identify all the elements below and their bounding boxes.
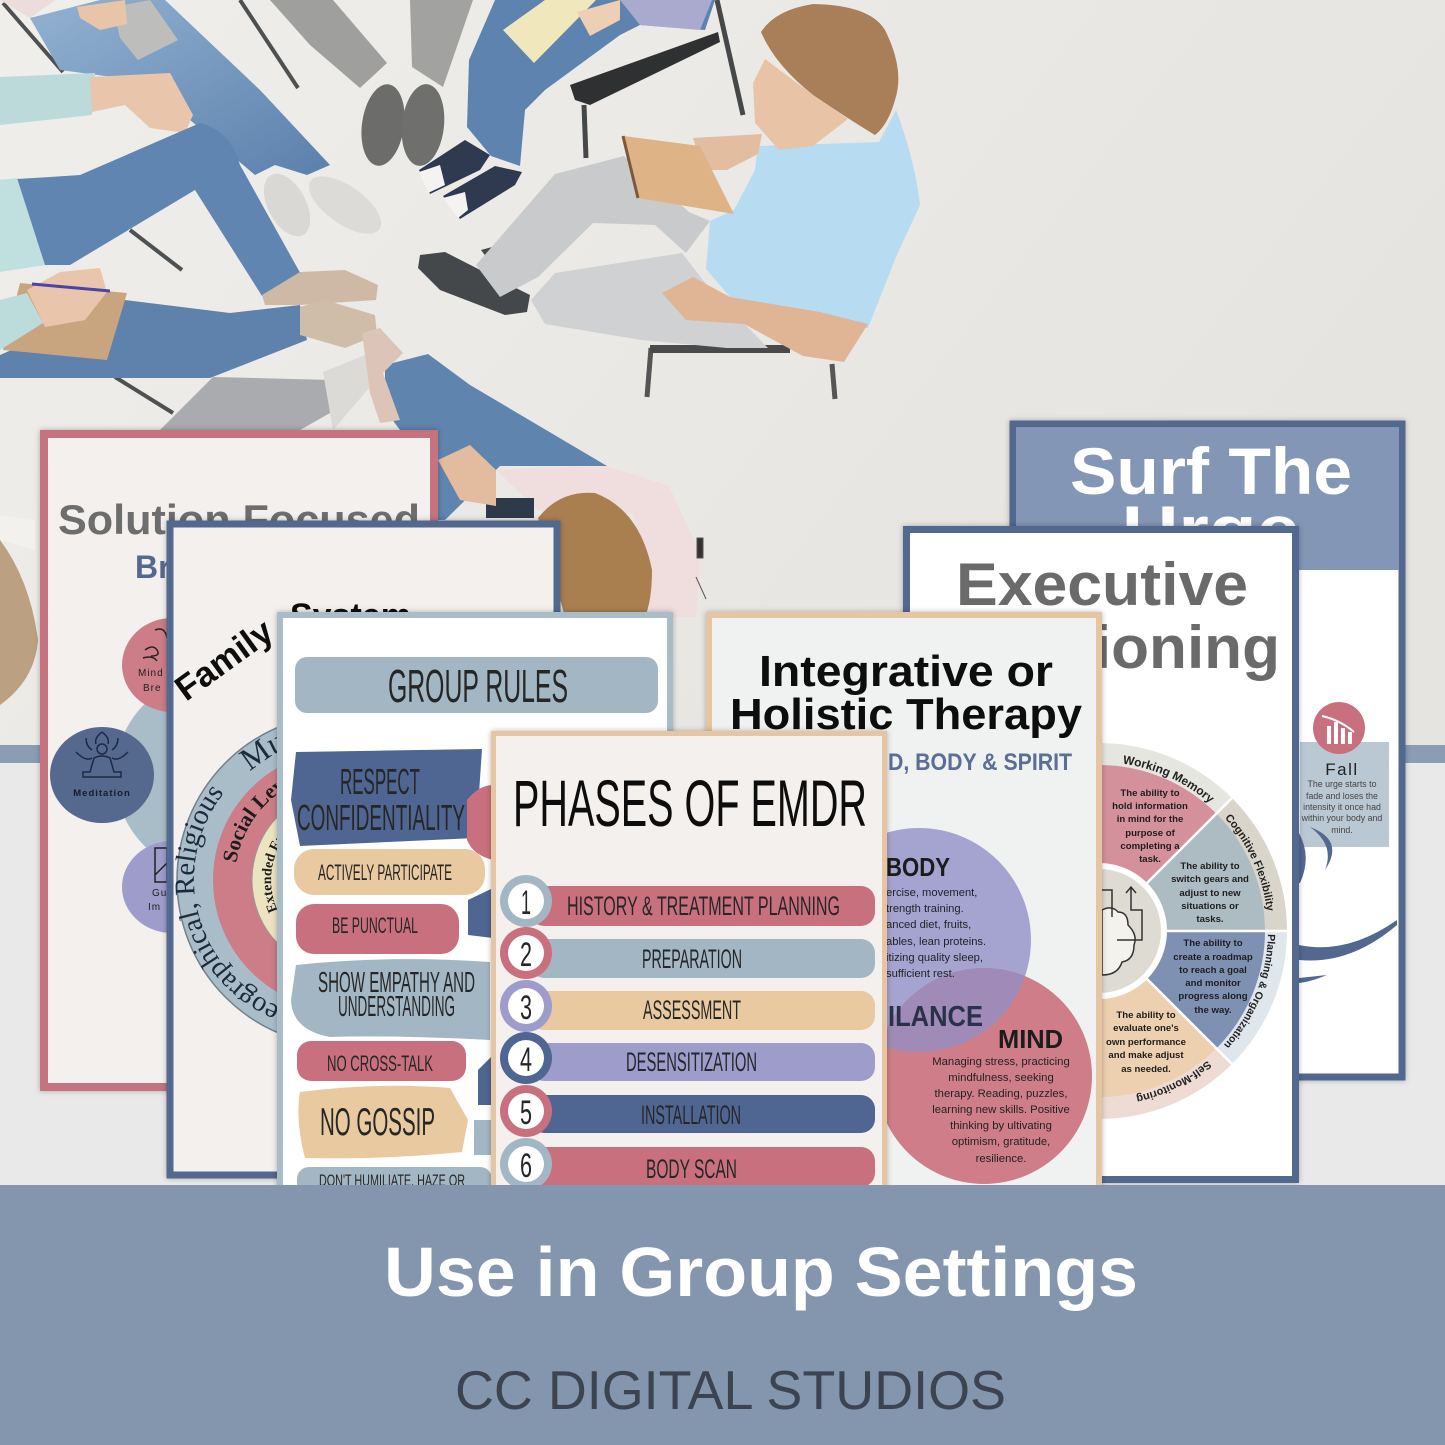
- wheel diagram: Self-Monitoring: [1136, 1062, 1211, 1102]
- poster: Executive Functioning: Functioning: [925, 614, 1280, 681]
- body text: anced diet, fruits,: [886, 919, 971, 931]
- wheel diagram: task.: [1139, 854, 1161, 865]
- heading pill: GROUP RULES: [388, 660, 568, 712]
- body text: [886, 852, 986, 980]
- concentric circle diagram: Mul: [238, 737, 277, 771]
- body text: BODY: [886, 852, 950, 882]
- brand name: CC DIGITAL STUDIOS: [455, 1359, 1006, 1421]
- phase 3: [500, 980, 875, 1032]
- wheel diagram: [1102, 743, 1287, 1119]
- icon: mindful breathing: [122, 618, 166, 712]
- poster: Group Rules: [280, 615, 670, 1207]
- icon: mindful breathing: Mind: [138, 668, 164, 679]
- phase 5: [500, 1085, 875, 1137]
- phase 3: 3: [520, 989, 532, 1027]
- rule: be punctual: BE PUNCTUAL: [332, 913, 418, 938]
- footer banner: [0, 1185, 1445, 1445]
- rule: respect confidentiality: CONFIDENTIALITY: [297, 797, 465, 838]
- poster: Surf The Urge: Urge: [1122, 492, 1300, 566]
- body text: trength training.: [886, 903, 964, 915]
- mind text: learning new skills. Positive: [932, 1104, 1070, 1116]
- phase 5: 5: [520, 1094, 532, 1132]
- phase 1: HISTORY & TREATMENT PLANNING: [567, 891, 840, 921]
- poster title: Surf The: [1070, 434, 1352, 508]
- wheel diagram: The ability to: [1180, 861, 1240, 872]
- poster title: Executive: [956, 551, 1248, 618]
- wheel diagram: create a roadmap: [1173, 952, 1253, 963]
- concentric circle diagram: [175, 727, 277, 1033]
- concentric circle diagram: Geographical, Religious: [175, 786, 277, 1017]
- poster title: Integrative or: [759, 647, 1053, 696]
- wheel diagram: evaluate one's: [1113, 1023, 1179, 1034]
- mind text: [932, 1024, 1070, 1165]
- icon: meditation: [50, 727, 154, 823]
- subtitle: D, BODY & SPIRIT: [888, 749, 1072, 776]
- step: fall: The urge starts to: [1308, 779, 1377, 789]
- balance label: ILANCE: [888, 1001, 983, 1033]
- accent band: [0, 745, 1445, 763]
- wave: [1299, 827, 1397, 983]
- step: fall: Fall: [1325, 760, 1359, 779]
- rule: show empathy: [291, 959, 490, 1040]
- rule: don't humiliate: DON'T HUMILIATE, HAZE OR: [319, 1171, 465, 1190]
- body text: sufficient rest.: [886, 968, 955, 980]
- photo: therapy group seen from above: [0, 0, 1445, 745]
- mind text: Managing stress, practicing: [932, 1056, 1070, 1068]
- phase 6: [500, 1138, 875, 1190]
- wheel diagram: progress along: [1178, 991, 1248, 1002]
- poster title: Solution Focused: [58, 496, 420, 543]
- phase 1: [500, 875, 875, 927]
- poster: Executive Functioning: [900, 522, 1302, 1185]
- venn circle: mind: [876, 968, 1092, 1184]
- poster: Family Systems: [163, 517, 564, 1182]
- step: fall: fade and loses the: [1306, 791, 1378, 801]
- icon: meditation: Meditation: [73, 788, 131, 799]
- poster: Surf The Urge: [1013, 424, 1402, 1077]
- icon: brain: [1102, 887, 1142, 975]
- mind text: thinking by ultivating: [950, 1120, 1052, 1132]
- wheel diagram: as needed.: [1121, 1064, 1171, 1075]
- phase 4: [500, 1032, 875, 1084]
- step: fall: [1300, 702, 1389, 847]
- icon: mindful breathing: Bre: [143, 683, 162, 694]
- rule: no cross-talk: NO CROSS-TALK: [327, 1051, 433, 1076]
- phase 2: 2: [520, 936, 532, 974]
- rule: no gossip: NO GOSSIP: [320, 1101, 435, 1144]
- poster subtitle: Br: [135, 549, 171, 585]
- poster: Integrative or Holistic Therapy: [709, 615, 1099, 1205]
- poster: Phases of EMDR: [494, 734, 884, 1204]
- poster title: PHASES OF EMDR: [513, 766, 867, 840]
- wheel diagram: adjust to new: [1179, 888, 1241, 899]
- wheel diagram: own performance: [1106, 1037, 1186, 1048]
- wheel diagram: purpose of: [1125, 828, 1176, 839]
- wheel diagram: The ability to: [1183, 938, 1243, 949]
- rule: respect confidentiality: [291, 749, 482, 846]
- step: fall: within your body and: [1301, 813, 1382, 823]
- mind text: resilience.: [976, 1153, 1026, 1165]
- wheel diagram: The ability to: [1116, 1010, 1176, 1021]
- mind text: MIND: [998, 1024, 1063, 1054]
- poster: Family Systems: System: [290, 597, 411, 635]
- step: fall: mind.: [1331, 825, 1353, 835]
- poster: Integrative or Holistic Therapy: Holistic Therapy: [730, 690, 1083, 739]
- phase 4: DESENSITIZATION: [626, 1047, 757, 1077]
- wheel diagram: the way.: [1194, 1005, 1232, 1016]
- phase 2: PREPARATION: [642, 944, 742, 974]
- headline: Use in Group Settings: [384, 1233, 1138, 1311]
- rule: actively participate: ACTIVELY PARTICIPATE: [318, 860, 452, 885]
- concentric circle diagram: Extended Fam: [262, 838, 277, 914]
- concentric circle diagram: Social Level: [224, 783, 277, 862]
- mind text: optimism, gratitude,: [952, 1136, 1050, 1148]
- wheel diagram: The ability to: [1120, 788, 1180, 799]
- phase 5: INSTALLATION: [641, 1100, 741, 1130]
- wheel diagram: situations or: [1181, 901, 1239, 912]
- phase 1: 1: [521, 884, 531, 922]
- rule: no gossip: [298, 1086, 468, 1158]
- lower background: [0, 745, 1445, 1185]
- wheel diagram: Planning & Organization: [1224, 934, 1276, 1048]
- poster: Solution Focused Brief Therapy: [44, 434, 434, 1087]
- wheel diagram: completing a: [1120, 841, 1180, 852]
- step: fall: intensity it once had: [1303, 802, 1381, 812]
- rule: respect confidentiality: RESPECT: [340, 761, 420, 802]
- phase 4: 4: [520, 1041, 532, 1079]
- phase 3: ASSESSMENT: [643, 995, 741, 1025]
- mind text: mindfulness, seeking: [948, 1072, 1054, 1084]
- phase 2: [500, 927, 875, 979]
- body text: ercise, movement,: [886, 887, 977, 899]
- venn overlap: [887, 968, 1025, 1052]
- icon: guided imagery: Im: [148, 902, 161, 913]
- icon: guided imagery: Gu: [152, 888, 167, 899]
- rule: actively participate: [294, 849, 485, 895]
- body text: itizing quality sleep,: [886, 952, 983, 964]
- rule: be punctual: [296, 904, 459, 954]
- venn circle: body: [887, 828, 1031, 1028]
- wheel diagram: Cognitive Flexibility: [1226, 814, 1274, 910]
- body text: ables, lean proteins.: [886, 936, 986, 948]
- phase 6: 6: [520, 1147, 532, 1185]
- rule: no cross-talk: [297, 1041, 466, 1081]
- poster title: Family: [168, 611, 281, 708]
- wheel diagram: hold information: [1112, 801, 1188, 812]
- wheel diagram: Working Memory: [1124, 755, 1214, 803]
- wheel diagram: to reach a goal: [1179, 965, 1247, 976]
- rule: don't humiliate: [297, 1167, 491, 1185]
- heading pill: [295, 657, 658, 713]
- phase 6: BODY SCAN: [646, 1154, 737, 1184]
- wheel diagram: in mind for the: [1117, 814, 1183, 825]
- rule: show empathy: SHOW EMPATHY AND: [318, 967, 475, 999]
- wheel diagram: and make adjust: [1108, 1050, 1184, 1061]
- icon: guided imagery: [122, 842, 166, 933]
- mind text: therapy. Reading, puzzles,: [935, 1088, 1067, 1100]
- rule: show empathy: UNDERSTANDING: [338, 991, 455, 1023]
- wheel diagram: and monitor: [1185, 978, 1241, 989]
- wheel diagram: switch gears and: [1171, 874, 1249, 885]
- wheel diagram: tasks.: [1196, 914, 1224, 925]
